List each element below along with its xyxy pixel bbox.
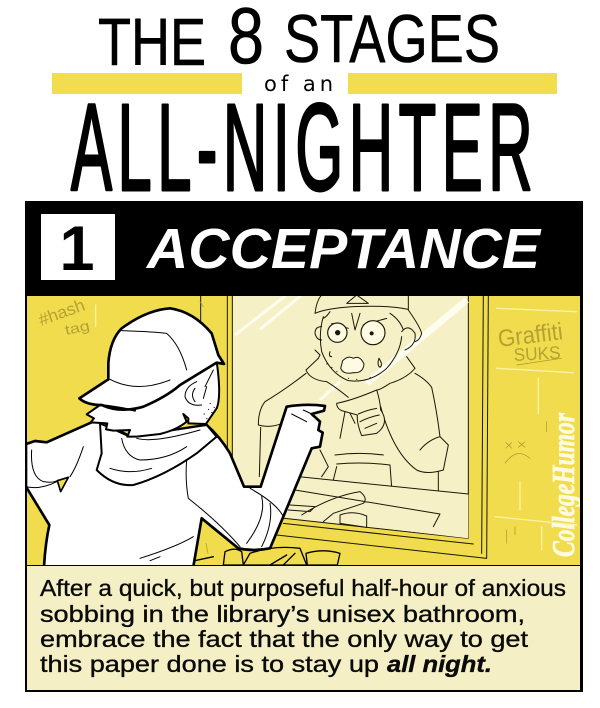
clothing folds — [26, 410, 312, 561]
watermark: CollegeHumor: CollegeHumor — [545, 413, 581, 557]
caption box: this paper done is to stay up — [40, 651, 379, 677]
brick lines — [96, 305, 577, 550]
hatch marks — [163, 302, 547, 553]
graffiti underline — [517, 358, 562, 365]
reflection: figure — [258, 295, 448, 492]
cap — [79, 308, 224, 411]
subtitle: of an: of an — [264, 72, 333, 96]
underarm gap — [57, 477, 68, 492]
graffiti: hashtag: #hash — [36, 295, 87, 330]
graffiti: Graffiti suks — [496, 318, 564, 365]
title line: The 8 Stages: STAGES — [284, 1, 500, 77]
hood — [97, 423, 217, 485]
caption box: After a quick, but purposeful half-hour of anxious — [40, 575, 566, 601]
ear and stubble — [185, 370, 214, 418]
wall — [27, 296, 580, 565]
head and hair — [87, 362, 219, 437]
title line: The 8 Stages: THE — [98, 5, 206, 80]
caption box — [27, 566, 580, 690]
counter items — [190, 547, 340, 565]
graffiti: Graffiti suks: Graffiti — [496, 318, 564, 353]
heading: acceptance: ACCEPTANCE — [145, 217, 542, 281]
torso and arm — [26, 405, 325, 567]
caption box: all night. — [387, 651, 492, 677]
caption box: sobbing in the library’s unisex bathroom, — [40, 601, 525, 627]
right yellow bar — [348, 73, 557, 94]
graffiti: Graffiti suks: SUKS — [513, 343, 561, 365]
title — [52, 0, 557, 217]
mirror frame — [201, 295, 488, 558]
caption box: embrace the fact that the only way to get — [40, 626, 529, 652]
mirror and reflection — [201, 295, 488, 558]
mirror glare — [235, 295, 467, 400]
illustration — [27, 295, 581, 565]
panel background — [25, 201, 583, 692]
left yellow bar — [52, 73, 242, 94]
stage number badge: 1 — [59, 214, 95, 284]
reflection: sink — [283, 477, 468, 538]
main character — [26, 308, 325, 567]
title line: All-Nighter: ALL-NIGHTER — [71, 79, 538, 217]
stage number badge — [41, 214, 115, 284]
wall details — [96, 302, 577, 553]
panel: stage 1 acceptance — [25, 201, 583, 692]
graffiti: hashtag: tag — [63, 317, 91, 338]
dead face doodle — [505, 442, 530, 463]
title line: The 8 Stages — [98, 0, 500, 80]
